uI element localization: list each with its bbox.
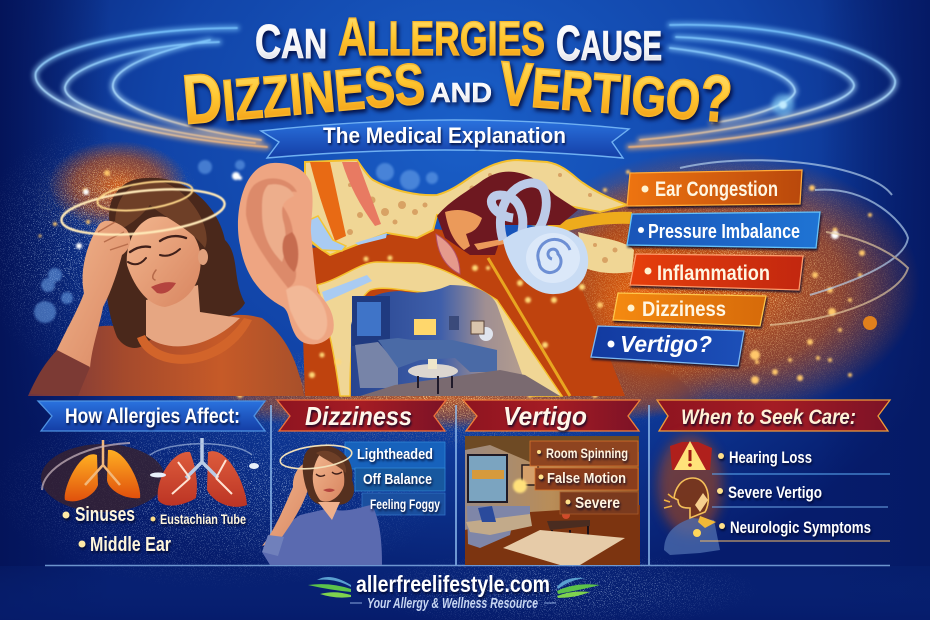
dizzy woman [262,442,382,565]
icon: eustachian tube [150,438,259,507]
bullet: severe vertigo: Severe Vertigo [728,483,822,502]
panel dividers [45,405,890,566]
bullet: false motion: False Motion [547,470,626,487]
website: allerfreelifestyle.com [356,571,550,597]
panel: dizziness [262,400,446,565]
ribbon heading [463,400,640,431]
icon: right leaves [557,578,600,598]
subtitle ribbon [261,120,629,158]
heading text: Vertigo [503,401,587,431]
bullet: eustachian tube: Eustachian Tube [160,511,246,527]
tag: ear congestion: Ear Congestion [655,178,778,201]
shirt [28,315,304,396]
tag: dizziness: Dizziness [642,298,726,321]
lower bone [317,262,562,396]
orange canal [300,228,625,396]
text: off balance: Off Balance [363,471,432,488]
middle ear cavity [437,172,578,255]
sofa [467,506,530,548]
title line 2 [180,40,735,139]
hair back [105,178,245,348]
nerve bundle [540,212,632,238]
bullet: middle ear: Middle Ear [90,534,171,556]
tag: vertigo [591,326,744,366]
title line 1 [255,7,662,71]
heading text: How Allergies Affect: [65,405,240,428]
title line 1: CAN [255,16,327,69]
text: feeling foggy: Feeling Foggy [370,496,440,512]
face [127,217,201,307]
upper temporal bone [305,160,627,255]
icon: left leaves [308,577,351,598]
tag: pressure imbalance: Pressure Imbalance [648,221,800,243]
tag: dizziness [613,293,766,326]
bone pores [328,173,618,322]
eyes, brows, mouth [128,236,186,280]
tagline: Your Allergy & Wellness Resource [367,596,538,612]
rule lines [700,474,890,541]
symptom tags [591,160,908,366]
rug [503,530,625,565]
symptom boxes [345,442,445,515]
neck and collar [146,285,240,346]
tag: vertigo: Vertigo? [620,331,712,357]
tag: inflammation [630,254,803,290]
subtitle text: The Medical Explanation [323,123,566,148]
ribbon heading [38,401,265,431]
title line 2: AND [430,77,492,108]
ribbon heading [657,400,890,431]
ribbon heading [277,400,446,431]
tag: ear congestion [627,170,802,206]
symptom boxes [530,441,638,514]
ear canal glow dots [309,256,585,378]
semicircular canals [491,183,546,240]
living room window [351,285,560,396]
title line 2: DIZZINESS [180,40,427,139]
scene swirl arcs [680,160,908,325]
title line 1: ALLERGIES [338,7,545,67]
title line 1: CAUSE [556,17,662,71]
bullet: hearing loss: Hearing Loss [729,448,812,467]
swirling motion lines [36,25,895,147]
arm and hand [56,221,130,368]
woman with headache [28,176,304,396]
bullet: sinuses [62,504,135,526]
ossicles [445,210,508,250]
icon: inflamed sinuses [41,440,165,512]
text: lightheaded: Lightheaded [357,446,433,463]
coffee table [408,364,458,378]
title line 2: VERTIGO? [497,44,735,136]
blue cartilage [307,216,346,251]
dizziness rings [59,176,227,241]
tag: pressure imbalance [627,212,820,248]
bullet: severe: Severe [575,495,620,512]
lower right bone [578,232,634,273]
particles [34,160,877,398]
bullet: room spinning: Room Spinning [546,445,628,461]
panel: vertigo [463,400,640,565]
bullet: hearing loss [718,448,812,467]
muscle stripes [310,162,346,241]
painting [468,455,507,502]
tag: inflammation: Inflammation [657,262,770,285]
panel: when to seek care [657,400,890,555]
bullet: neurologic symptoms: Neurologic Symptoms [730,518,871,537]
eardrum [436,234,460,274]
ear anatomy cross-section [238,160,634,396]
panel: how allergies affect [38,401,265,556]
footer [308,571,600,612]
bullet: sinuses: Sinuses [75,504,135,526]
title [180,7,735,139]
heading text: When to Seek Care: [681,406,856,429]
room illustration [465,436,640,565]
icon: warning [658,435,722,535]
coffee table [547,520,590,530]
cochlea [503,226,588,294]
outer ear [238,163,334,344]
lamp [513,479,527,493]
eustachian tube [488,258,570,396]
icon: head and nerves [664,478,720,555]
heading text: Dizziness [305,401,412,431]
